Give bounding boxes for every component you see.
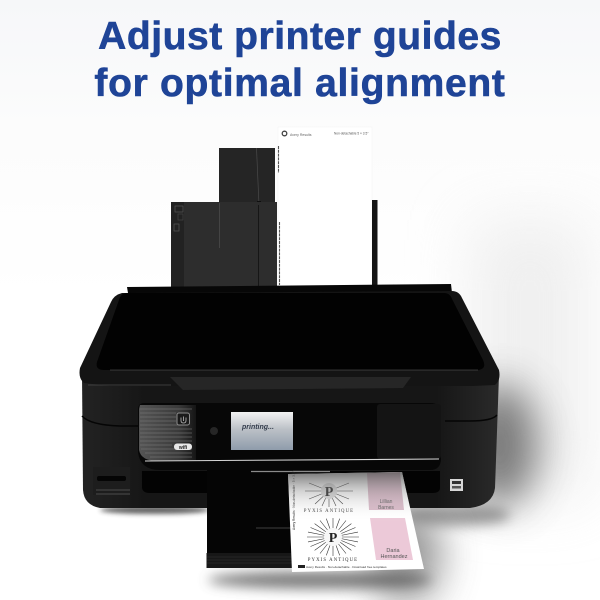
upper sunburst logo [304, 483, 354, 514]
background shadow [100, 220, 590, 600]
lid shell [80, 291, 500, 386]
dark lower media sheet [171, 202, 277, 288]
recycling mark on sheet [282, 131, 287, 136]
upper sunburst logo: P [325, 485, 334, 500]
paper guide [372, 200, 378, 288]
top pink label [367, 472, 404, 511]
output slot handle [251, 470, 330, 472]
sheet side markings [278, 146, 280, 285]
sheet footer: Avery Results · Non-detachable · Download free templates [306, 565, 387, 569]
lower sunburst logo: PYXIS ANTIQUE [308, 558, 358, 563]
bottom pink label: Hernandez [381, 554, 408, 560]
printed label sheet [288, 471, 424, 572]
rear hinge bar [127, 284, 452, 293]
seam [82, 415, 497, 426]
paper tray [206, 470, 293, 568]
ribbed right panel [377, 404, 441, 459]
home button [210, 427, 218, 435]
wifi badge: wifi [178, 445, 188, 451]
bottom pink label: Daria [386, 548, 401, 554]
top pink label: Lillian [380, 499, 393, 505]
memory card slot [93, 467, 130, 495]
scanner lid glass [97, 293, 484, 370]
sheet reference text: Non-detachable 5 × 3.5" [334, 132, 368, 136]
printer body [80, 284, 500, 568]
top pink label: Barnes [378, 505, 394, 511]
title: Adjust printer guides [98, 15, 502, 58]
power button [177, 413, 190, 425]
screen text: printing... [241, 424, 274, 431]
wifi badge [174, 444, 192, 451]
certification label [450, 479, 463, 491]
lower sunburst logo [307, 518, 359, 563]
upper sunburst logo: PYXIS ANTIQUE [304, 509, 354, 514]
bottom pink label [370, 518, 413, 560]
title [94, 15, 506, 105]
shadow under printer on sheet [288, 472, 424, 572]
title: for optimal alignment [94, 62, 506, 105]
panel lower highlight [145, 459, 439, 461]
display screen [231, 412, 293, 450]
front housing [82, 375, 499, 508]
lid front handle [170, 377, 411, 390]
white sheet in rear feeder [278, 127, 372, 287]
lid highlight [88, 370, 478, 385]
sheet side text: Avery Results · Non-detachable · 5 × 3.5" [292, 471, 296, 530]
sheet header text: Avery Results [290, 133, 312, 137]
output slot [142, 471, 440, 493]
control panel [138, 403, 441, 470]
dark upper media sheet [219, 148, 275, 211]
ribbed left panel [139, 405, 196, 461]
lower sunburst logo: P [329, 531, 338, 546]
